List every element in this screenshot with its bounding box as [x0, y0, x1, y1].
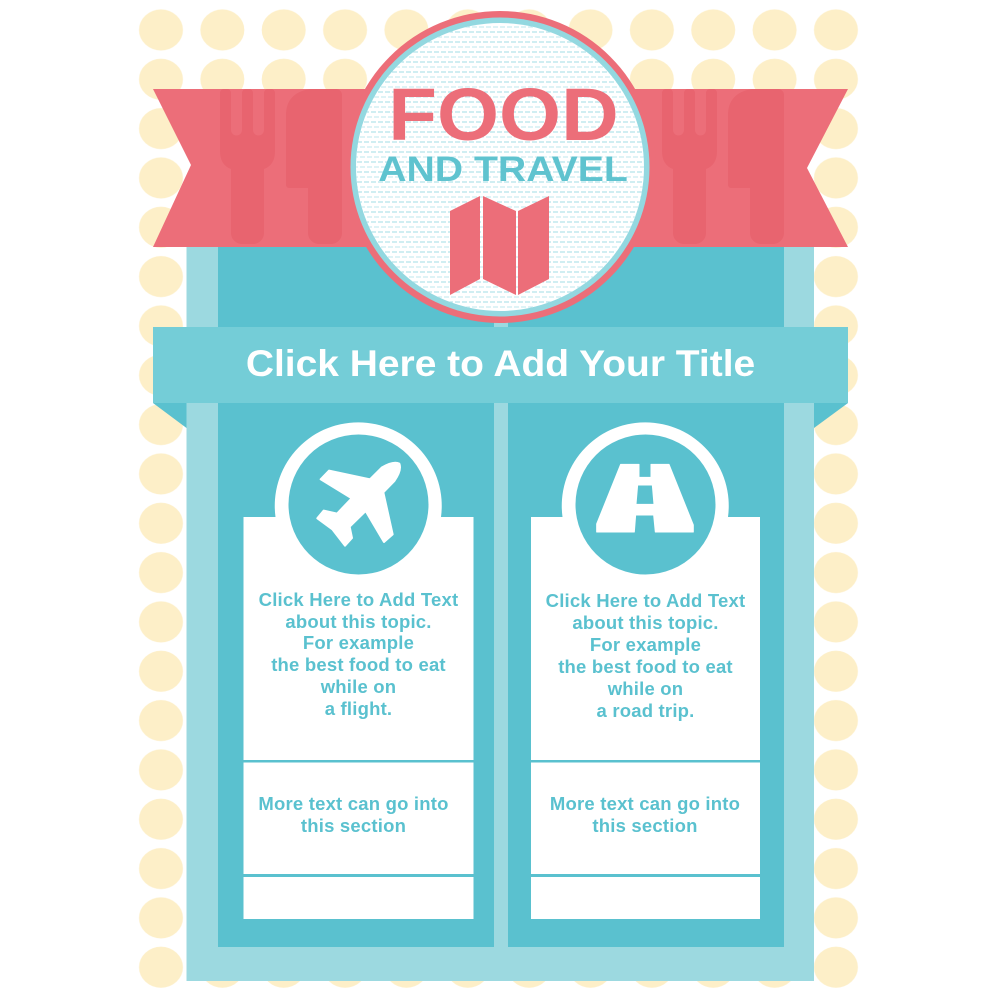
icon: left fork	[220, 89, 275, 244]
card second section text	[550, 793, 740, 836]
panel: road trip card	[531, 422, 760, 919]
panel: flight card	[244, 422, 474, 919]
card body text	[546, 590, 745, 721]
title badge	[344, 11, 656, 323]
background dot pattern	[130, 5, 866, 992]
icon circle	[576, 434, 716, 574]
card body text: Click Here to Add Text	[546, 590, 745, 611]
card body text: the best food to eat	[271, 654, 446, 675]
card second section text	[258, 793, 449, 836]
card body text	[259, 589, 458, 719]
card second section text: More text can go into	[550, 793, 740, 814]
icon: right knife	[728, 89, 784, 244]
section divider upper	[531, 760, 760, 762]
card second section text: this section	[301, 815, 406, 836]
card body text: For example	[303, 632, 414, 653]
icon: left knife	[286, 89, 342, 244]
panel: left dark column	[218, 247, 494, 947]
card white body	[244, 422, 474, 919]
card body text: while on	[607, 678, 683, 699]
badge outer ring	[344, 11, 656, 323]
section divider lower	[531, 874, 760, 877]
badge inner ring	[350, 18, 650, 316]
heading: FOOD: FOOD	[388, 74, 619, 156]
title band	[153, 327, 848, 428]
icon: right fork	[662, 89, 717, 244]
panel: outer light frame	[186, 247, 814, 981]
card body text: about this topic.	[285, 611, 432, 632]
card body text: a flight.	[325, 698, 392, 719]
card body text: while on	[320, 676, 396, 697]
badge white disc	[356, 23, 644, 311]
card white body	[531, 422, 760, 919]
band right fold	[814, 403, 848, 428]
icon: airplane	[317, 463, 400, 546]
card body text: the best food to eat	[558, 656, 733, 677]
ribbon banner	[153, 89, 848, 247]
badge texture	[356, 23, 644, 311]
section divider upper	[244, 760, 474, 762]
band left fold	[153, 403, 186, 428]
band title text: Click Here to Add Your Title	[246, 344, 755, 385]
card body text: about this topic.	[572, 612, 719, 633]
ribbon shape	[153, 89, 848, 247]
card body text: a road trip.	[596, 700, 694, 721]
heading: AND TRAVEL: AND TRAVEL	[378, 149, 628, 189]
card second section text: More text can go into	[258, 793, 449, 814]
card second section text: this section	[592, 815, 698, 836]
icon: road	[597, 464, 693, 532]
card body text: Click Here to Add Text	[259, 589, 458, 610]
card body text: For example	[590, 634, 701, 655]
panel: right dark column	[508, 247, 784, 947]
icon: folded map	[450, 196, 549, 295]
band bar	[153, 327, 848, 403]
section divider lower	[244, 874, 474, 877]
icon circle	[288, 434, 428, 574]
